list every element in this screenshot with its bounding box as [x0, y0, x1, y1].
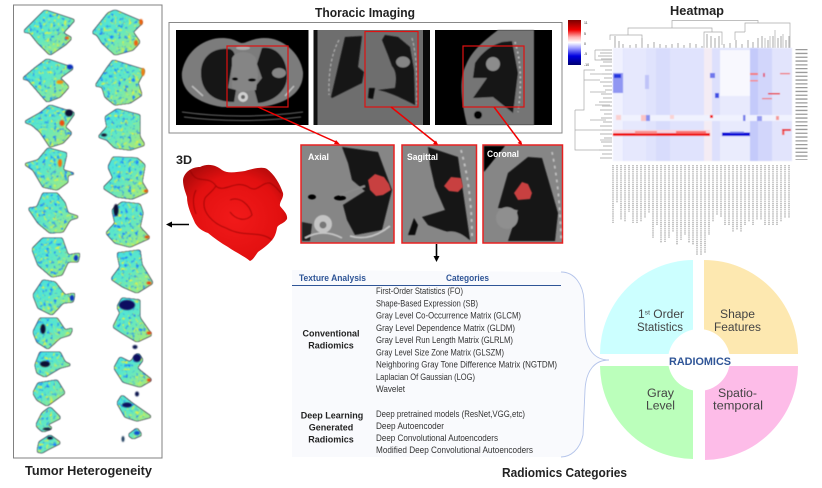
conventional categories list — [376, 286, 557, 395]
region-of-interest boxes — [227, 32, 524, 107]
row heading: conventional radiomics — [302, 328, 360, 350]
tumor slices: left and right columns — [22, 10, 153, 453]
close-up: sagittal — [402, 145, 476, 243]
heatmap colour legend: 0 — [584, 42, 586, 46]
quadrant: gray level — [600, 366, 693, 459]
panel: thoracic imaging views — [169, 22, 562, 133]
row heading: conventional radiomics: Conventional — [302, 328, 360, 338]
brace background — [292, 270, 609, 457]
table header: Texture Analysis — [299, 273, 366, 284]
panel: tumor heterogeneity — [14, 5, 162, 458]
conventional categories list: Gray Level Run Length Matrix (GLRLM) — [376, 335, 513, 346]
row heading: deep learning radiomics: Generated — [309, 422, 353, 432]
heatmap colour legend: 5 — [584, 32, 586, 36]
row heading: deep learning radiomics: Deep Learning — [301, 410, 363, 420]
deep learning categories list: Deep Autoencoder — [376, 421, 445, 432]
row heading: deep learning radiomics: Radiomics — [308, 434, 354, 444]
deep learning categories list: Modified Deep Convolutional Autoencoders — [376, 445, 533, 456]
conventional categories list: Gray Level Co-Occurrence Matrix (GLCM) — [376, 310, 521, 322]
heatmap colour legend: -10 — [584, 63, 589, 67]
heatmap row labels — [796, 49, 808, 160]
heading: radiomics categories: Radiomics Categories — [502, 465, 627, 480]
heatmap matrix — [613, 48, 792, 161]
close-up: coronal — [483, 145, 562, 243]
centre circle — [668, 329, 730, 391]
CT axial view — [176, 30, 308, 125]
close-up: axial — [301, 145, 394, 243]
table header: Categories — [446, 273, 489, 284]
arrows: box to close-up — [258, 107, 522, 146]
deep learning categories list: Deep pretrained models (ResNet,VGG,etc) — [376, 409, 525, 420]
3D tumor render — [183, 165, 287, 261]
quadrant: shape features — [704, 260, 798, 354]
row heading: conventional radiomics: Radiomics — [308, 340, 354, 350]
quadrant: first order statistics: st — [645, 310, 650, 316]
quadrant: first order statistics: 1 — [638, 309, 644, 321]
brace outline — [561, 272, 609, 457]
heatmap column labels — [613, 165, 789, 255]
conventional categories list: Neighboring Gray Tone Difference Matrix (NGTDM) — [376, 360, 557, 370]
quadrant: first order statistics: Order — [650, 309, 684, 321]
tumor hot spots and necrotic patches — [40, 19, 152, 442]
quadrant: shape features: Shape — [720, 309, 755, 321]
conventional categories list: First-Order Statistics (FO) — [376, 286, 463, 297]
heatmap top dendrogram — [610, 20, 790, 48]
heatmap colour legend: 11 — [584, 21, 588, 25]
quadrant: spatio-temporal: temporal — [713, 400, 763, 412]
conventional categories list: Gray Level Size Zone Matrix (GLSZM) — [376, 348, 504, 358]
heatmap left dendrogram — [575, 50, 612, 158]
label: coronal: Coronal — [487, 149, 519, 159]
heatmap colour legend — [568, 20, 589, 67]
arrow: 3D to heterogeneity — [166, 222, 189, 228]
quadrant: gray level: Level — [646, 400, 675, 412]
panel: radiomics table — [292, 270, 609, 457]
deep learning categories list: Deep Convolutional Autoencoders — [376, 433, 498, 444]
deep learning categories list — [376, 409, 533, 456]
label: sagittal: Sagittal — [407, 152, 438, 162]
label: axial: Axial — [308, 152, 329, 162]
centre label: RADIOMICS — [669, 356, 731, 368]
conventional categories list: Wavelet — [376, 384, 405, 395]
quadrant: first order statistics — [600, 260, 693, 354]
table header — [299, 273, 489, 284]
radiomics quadrant diagram — [600, 260, 798, 460]
conventional categories list: Laplacian Of Gaussian (LOG) — [376, 372, 475, 383]
arrow: close-ups to table — [434, 244, 440, 262]
quadrant: spatio-temporal: Spatio- — [718, 388, 757, 400]
conventional categories list: Shape-Based Expression (SB) — [376, 298, 478, 310]
conventional categories list: Gray Level Dependence Matrix (GLDM) — [376, 323, 515, 334]
quadrant: gray level: Gray — [647, 388, 674, 400]
CT sagittal view — [435, 30, 552, 125]
row heading: deep learning radiomics — [301, 410, 363, 444]
heading: heatmap: Heatmap — [670, 3, 724, 18]
heatmap band: red and blue row — [613, 129, 791, 136]
quadrant: first order statistics: Statistics — [637, 322, 683, 334]
label: 3D: 3D — [176, 153, 192, 167]
heatmap colour legend: -5 — [584, 52, 587, 56]
CT coronal view — [314, 30, 430, 125]
quadrant: shape features: Features — [714, 322, 761, 334]
quadrant: spatio-temporal — [705, 366, 798, 460]
heading: tumor heterogeneity: Tumor Heterogeneity — [25, 463, 153, 478]
heading: thoracic imaging: Thoracic Imaging — [315, 5, 415, 20]
